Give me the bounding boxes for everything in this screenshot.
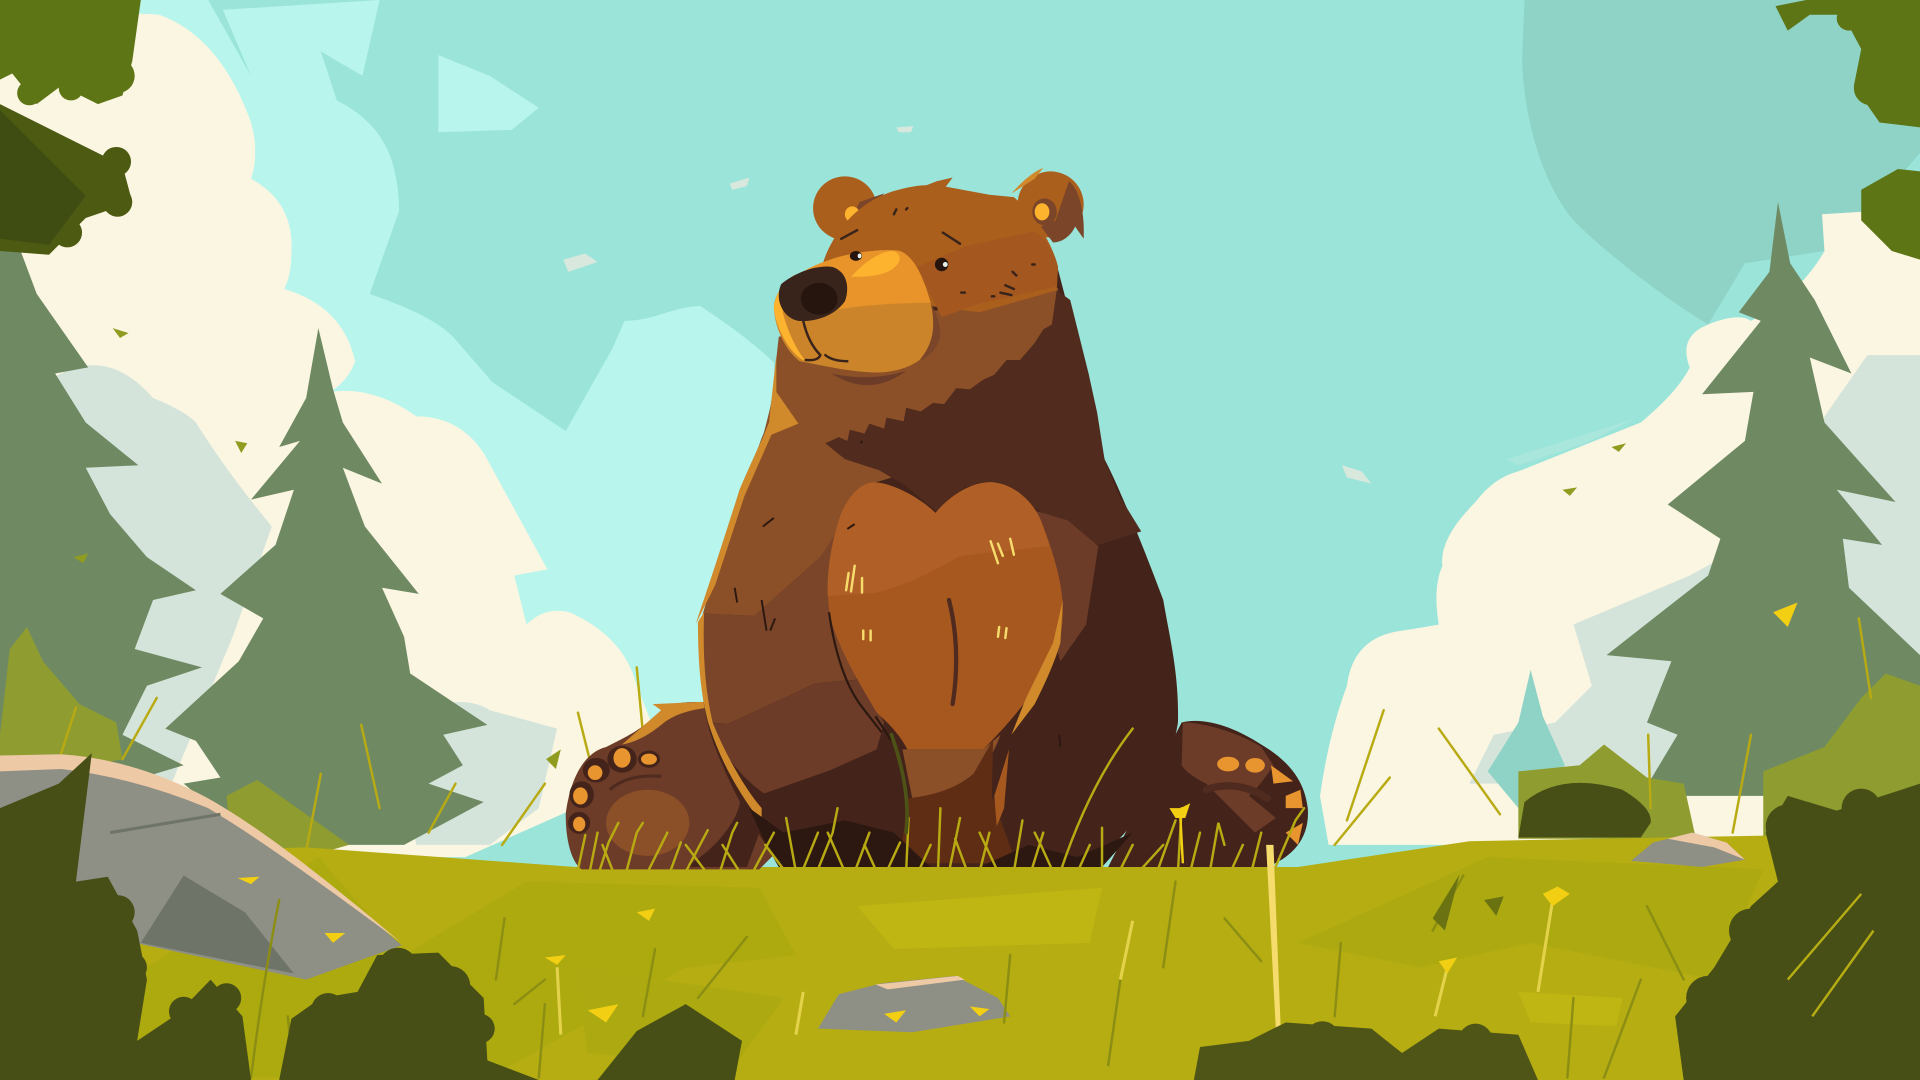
chest collar dark fur <box>825 290 1141 545</box>
head fur tuft <box>921 178 953 187</box>
meadow stems and flowers <box>73 328 1798 1078</box>
brows and freckles <box>841 208 1035 296</box>
belly <box>828 482 1063 863</box>
foreground bush bottom right <box>1194 1021 1538 1080</box>
left hind leg <box>566 702 784 869</box>
foreground grass tuft along bear base <box>578 729 1304 872</box>
back meadow grass <box>61 618 1871 851</box>
chin shadow <box>831 371 906 385</box>
rock left <box>0 754 402 980</box>
fur marks <box>735 441 1060 747</box>
right hind leg <box>1108 721 1308 867</box>
right clouds <box>1320 208 1920 845</box>
head <box>774 178 1058 385</box>
far bushes <box>0 627 1920 882</box>
left foot toe pads <box>568 746 660 834</box>
foreground bush bottom centre <box>598 1004 742 1080</box>
ground <box>0 833 1920 1080</box>
pine tree left middle <box>165 328 487 845</box>
bear <box>566 168 1308 869</box>
mouth <box>803 321 847 361</box>
left clouds <box>0 14 651 857</box>
nose <box>779 266 847 321</box>
lower body shadow <box>749 808 1133 867</box>
muzzle <box>774 250 933 372</box>
eyes <box>850 251 948 271</box>
left ear <box>813 176 884 240</box>
pine tree right <box>1607 202 1920 796</box>
small rock centre <box>818 976 1010 1032</box>
body left side tones <box>696 288 1060 823</box>
tree foliage top right <box>1776 0 1920 260</box>
foreground bush bottom centre left <box>279 948 539 1080</box>
small rock right <box>1631 833 1745 867</box>
right ear <box>1011 168 1084 242</box>
right chest patch <box>1035 511 1098 661</box>
body silhouette <box>701 190 1178 867</box>
foreground bush right <box>1675 784 1920 1080</box>
tree foliage top left <box>0 0 141 255</box>
pine tree left edge <box>0 245 202 784</box>
yellow flower <box>1169 803 1190 863</box>
foreground bush bottom left <box>0 753 251 1080</box>
